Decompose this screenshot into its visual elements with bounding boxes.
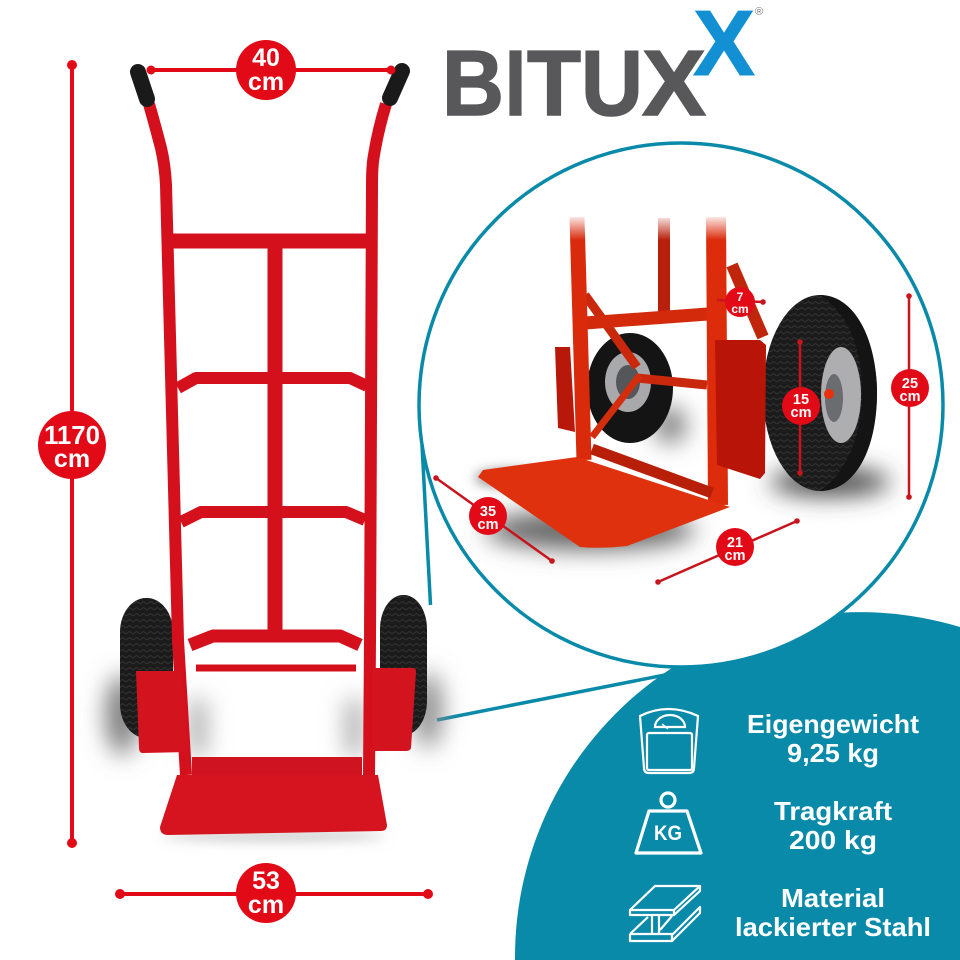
dimension: height 1170 cm: 1170	[44, 420, 100, 450]
dimension: wheel width 7 cm: 7	[737, 290, 744, 304]
wheels	[120, 595, 427, 738]
icon: steel I-beam	[630, 886, 700, 941]
icon: KG weight	[636, 793, 701, 853]
brand logo: B	[442, 31, 504, 135]
label: Eigengewicht 9,25 kg	[747, 709, 919, 768]
dimension: wheel diameter 25 cm	[891, 293, 929, 500]
wheel guards	[555, 340, 766, 479]
dimension: plate depth 35 cm: 35	[480, 504, 496, 520]
icon: KG weight: KG	[654, 822, 682, 845]
dimension: handle width 40 cm: 40	[252, 44, 280, 72]
label: Eigengewicht 9,25 kg: 9,25 kg	[787, 738, 879, 768]
label: Tragkraft 200 kg: 200 kg	[789, 825, 877, 855]
frame tubes	[577, 217, 763, 505]
dimension: wheel diameter 25 cm: cm	[900, 389, 920, 405]
detail lens circle	[419, 143, 943, 667]
teal info panel background	[515, 612, 960, 960]
base plate	[160, 757, 387, 835]
dimension: plate width 21 cm	[655, 518, 800, 585]
dimension: base width 53 cm: 53	[252, 867, 280, 895]
dimension: wheel inner 15 cm	[782, 339, 820, 476]
label: Material lackierter Stahl	[735, 883, 931, 942]
dimension: plate depth 35 cm: cm	[478, 517, 498, 533]
dimension: height 1170 cm: cm	[54, 445, 90, 473]
label: Tragkraft 200 kg: Tragkraft	[774, 796, 892, 826]
icon: bathroom scale	[640, 709, 698, 773]
brand logo: T	[527, 31, 581, 135]
handle grips	[138, 71, 402, 99]
dimension: wheel diameter 25 cm: 25	[902, 376, 918, 392]
main photo: red hand truck	[106, 71, 442, 840]
wheel guards	[136, 668, 416, 753]
foot plate	[478, 457, 730, 548]
label: Material lackierter Stahl: lackierter Stahl	[735, 912, 931, 942]
dimension: plate depth 35 cm	[433, 475, 555, 564]
brand logo: X	[642, 31, 706, 135]
dimension: handle width 40 cm: cm	[248, 68, 284, 96]
dimension: wheel width 7 cm: cm	[731, 302, 749, 316]
label: Material lackierter Stahl: Material	[781, 883, 885, 913]
label: Tragkraft 200 kg	[774, 796, 892, 855]
label: Eigengewicht 9,25 kg: Eigengewicht	[747, 709, 919, 739]
dimension: plate width 21 cm: 21	[727, 535, 743, 551]
back wheel	[587, 333, 673, 443]
detail photo: base and wheels close-up	[475, 214, 890, 550]
brand logo: ®	[755, 6, 763, 18]
dimension: handle width 40 cm	[146, 40, 396, 100]
dimension: height 1170 cm	[38, 60, 106, 848]
detail lens connector lines	[422, 445, 690, 720]
front wheel	[763, 295, 877, 491]
dimension: wheel width 7 cm	[717, 287, 766, 317]
brand logo: U	[581, 31, 643, 135]
dimension: base width 53 cm	[115, 863, 433, 923]
dimension: wheel inner 15 cm: 15	[793, 392, 809, 408]
dimension: base width 53 cm: cm	[248, 891, 284, 919]
top fade	[560, 214, 735, 240]
brand logo	[442, 0, 763, 135]
brand logo: I	[505, 31, 526, 135]
dimension: plate width 21 cm: cm	[725, 548, 745, 564]
tubular frame	[149, 104, 386, 775]
dimension: wheel inner 15 cm: cm	[791, 405, 811, 421]
